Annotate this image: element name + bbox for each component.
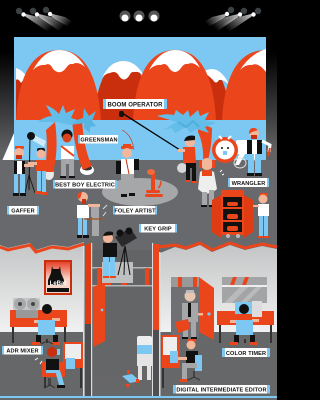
- bottom floor line: [0, 396, 277, 398]
- right room: [152, 243, 277, 396]
- color timer desk and person: [217, 301, 274, 345]
- right spotlights: [201, 7, 261, 33]
- label: foley artist: FOLEY ARTIST: [114, 209, 156, 215]
- cabinet assistant: [253, 193, 269, 238]
- label: color timer: [222, 348, 270, 357]
- label: best boy electric: [53, 180, 117, 189]
- ADR desk and reel machine: [10, 298, 67, 343]
- studio floor: [0, 160, 277, 250]
- label: gaffer: [7, 206, 39, 215]
- label: digital intermediate editor: DIGITAL INTERMEDIATE EDITOR: [176, 388, 267, 394]
- label: gaffer: GAFFER: [11, 209, 35, 215]
- best boy electric: [28, 148, 47, 195]
- lion: [212, 136, 258, 168]
- prop cabinet: [212, 190, 253, 238]
- label: color timer: COLOR TIMER: [226, 351, 266, 357]
- greensman: [60, 130, 75, 178]
- backdrop sky: [14, 37, 266, 160]
- label: adr mixer: [2, 346, 43, 355]
- label: digital intermediate editor: [173, 385, 270, 394]
- foley artist: [77, 192, 107, 238]
- snake prop: [145, 169, 163, 197]
- label: foley artist: [113, 206, 157, 215]
- label: adr mixer: ADR MIXER: [6, 349, 39, 355]
- left room: [0, 242, 92, 396]
- boom operator: [178, 136, 197, 183]
- label: best boy electric: BEST BOY ELECTRIC: [55, 183, 115, 189]
- label: greensman: GREENSMAN: [80, 138, 118, 144]
- right room door and man: [171, 277, 214, 340]
- digital intermediate editor: [162, 335, 202, 388]
- mountains: [16, 49, 266, 120]
- red bat poster: LeBat: [50, 281, 66, 287]
- red bat poster: [44, 260, 72, 295]
- center lights: [120, 10, 160, 22]
- label: wrangler: WRANGLER: [232, 181, 265, 187]
- label: key grip: KEY GRIP: [144, 227, 172, 233]
- wrangler: [247, 128, 270, 176]
- boom pole: [119, 111, 180, 150]
- second ADR station: [35, 342, 83, 388]
- gaffer: [13, 146, 34, 196]
- corridor prop machine: [122, 336, 152, 387]
- key grip and camera: [102, 228, 137, 285]
- palm tree right: [157, 110, 216, 173]
- light cast on floor: [2, 133, 14, 161]
- studio lamp: [25, 132, 46, 193]
- label: key grip: [139, 224, 177, 233]
- label: greensman: [78, 135, 120, 144]
- label: boom operator: [103, 99, 167, 109]
- corridor wall and door: [92, 267, 152, 347]
- label: boom operator: BOOM OPERATOR: [107, 102, 163, 108]
- window: [222, 277, 267, 303]
- ground spot: [102, 178, 178, 206]
- left spotlights: [16, 7, 76, 33]
- label: wrangler: [228, 178, 269, 187]
- palm tree left: [37, 105, 96, 180]
- camera operator with hat: [116, 144, 139, 197]
- ADR mixer person: [32, 304, 60, 345]
- old man with headphones: [198, 158, 224, 207]
